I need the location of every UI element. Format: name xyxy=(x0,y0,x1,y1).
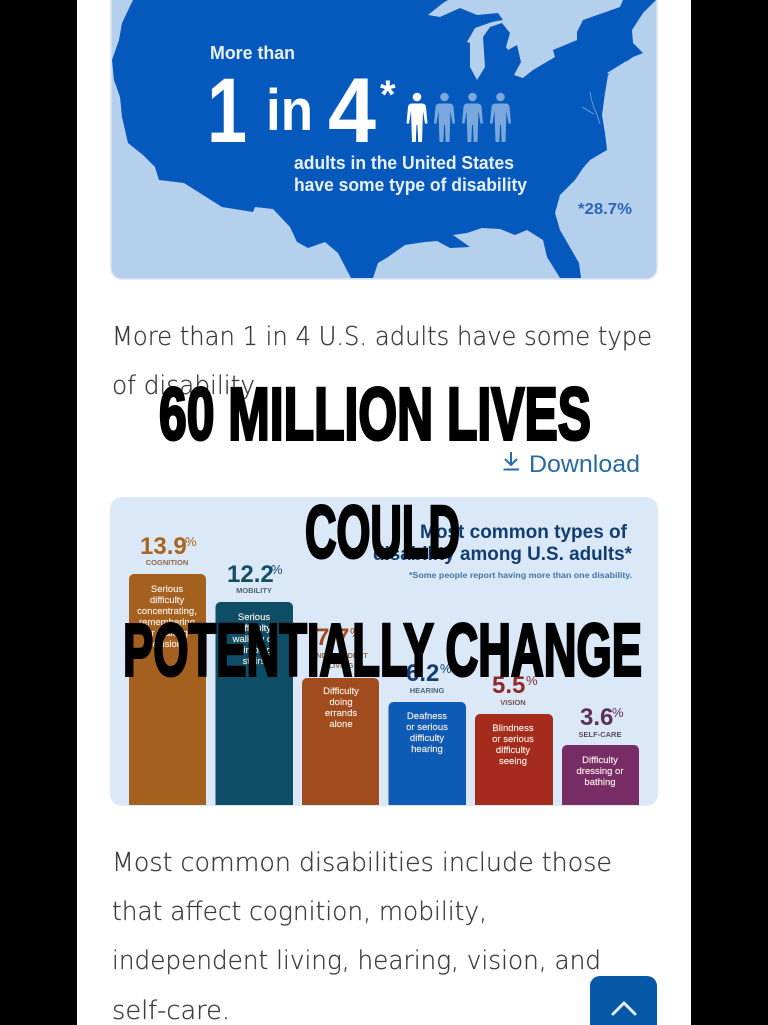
bar: independent living: doing xyxy=(329,697,353,708)
bar: independent living: LIVING xyxy=(328,661,354,670)
text: more than: More than xyxy=(210,43,295,63)
bar: cognition xyxy=(129,533,206,805)
bar: independent living xyxy=(302,624,379,805)
bar: self-care xyxy=(562,704,639,805)
bar: hearing: difficulty xyxy=(410,733,444,744)
bar: mobility: difficulty xyxy=(237,623,271,634)
bar: vision: Blindness xyxy=(492,723,534,734)
panel: map card xyxy=(111,0,657,279)
overlay title: 60 million lives could potentially change: COULD xyxy=(305,490,460,574)
bar: mobility: climbing xyxy=(237,645,271,656)
scroll to top button xyxy=(590,976,657,1025)
bar: self-care: SELF-CARE xyxy=(579,730,621,739)
bar: cognition: COGNITION xyxy=(146,558,188,567)
bar: self-care: % xyxy=(612,705,624,720)
bar: mobility xyxy=(216,561,293,805)
bar: cognition: 13.9 xyxy=(140,533,187,560)
chart heading xyxy=(373,522,633,565)
bar: mobility: MOBILITY xyxy=(236,586,272,595)
statistic: 1 in 4: 1 xyxy=(207,60,247,162)
bar: vision: % xyxy=(526,673,538,688)
bar: independent living: Difficulty xyxy=(323,686,359,697)
bar: vision: VISION xyxy=(500,698,526,707)
bar: independent living: INDEPENDENT xyxy=(314,651,368,660)
chart heading: Most common types of xyxy=(420,522,628,543)
bar: self-care: bathing xyxy=(584,777,616,788)
statistic: 1 in 4 xyxy=(207,60,396,162)
text block: chart caption xyxy=(112,848,612,1025)
text block: chart caption: independent living, hearing, vision, and xyxy=(112,946,601,976)
map of the United States xyxy=(112,0,656,278)
statistic: 1 in 4: 4 xyxy=(328,60,376,162)
text block: map caption xyxy=(112,322,652,401)
bar: hearing: or serious xyxy=(406,722,448,733)
bar: cognition: or making xyxy=(146,628,188,639)
bar: cognition: difficulty xyxy=(150,595,184,606)
bar: mobility: Serious xyxy=(238,612,270,623)
text: adults in the United States xyxy=(294,153,527,195)
text block: map caption: More than 1 in 4 U.S. adults have some type xyxy=(112,322,652,352)
bar: mobility: stairs xyxy=(243,656,266,667)
text block: map caption: of disability xyxy=(112,371,255,401)
bar: hearing: 6.2 xyxy=(406,660,439,687)
panel: bar chart card xyxy=(110,497,658,806)
bar: independent living: % xyxy=(350,625,362,640)
icon: four people, one highlighted xyxy=(406,93,511,142)
bar: cognition: remembering xyxy=(139,617,195,628)
bar: mobility: 12.2 xyxy=(227,561,274,588)
bar: self-care: dressing or xyxy=(576,766,624,777)
chart heading: disability among U.S. adults* xyxy=(373,544,633,565)
bar: cognition: concentrating, xyxy=(137,606,197,617)
bar: cognition: Serious xyxy=(151,584,183,595)
text block: chart caption: Most common disabilities include those xyxy=(112,848,612,878)
download link: Download xyxy=(529,451,640,478)
bar: vision: seeing xyxy=(499,756,527,767)
footnote: 28.7 percent: *28.7% xyxy=(578,201,632,218)
chart footnote: *Some people report having more than one disability. xyxy=(409,570,632,580)
statistic: 1 in 4: in xyxy=(266,78,313,143)
bar: cognition: decisions xyxy=(147,639,187,650)
bar: hearing: HEARING xyxy=(410,686,444,695)
bar: self-care: Difficulty xyxy=(582,755,618,766)
text: adults in the United States: have some type of disability xyxy=(294,175,527,195)
statistic: 1 in 4: * xyxy=(380,73,396,117)
bar: vision xyxy=(475,672,553,805)
bar: vision: or serious xyxy=(492,734,534,745)
bar: independent living: errands xyxy=(325,708,357,719)
text: adults in the United States: adults in the United States xyxy=(294,153,514,173)
bar: vision: 5.5 xyxy=(492,672,525,699)
bar: mobility: walking or xyxy=(232,634,275,645)
bar: independent living: 7.7 xyxy=(316,624,349,651)
bar: hearing: Deafness xyxy=(407,711,447,722)
bar: hearing: % xyxy=(440,661,452,676)
bar: hearing xyxy=(388,660,466,805)
text block: chart caption: that affect cognition, mobility, xyxy=(112,897,487,927)
bar: mobility: % xyxy=(271,562,283,577)
bar: self-care: 3.6 xyxy=(580,704,613,731)
bar: hearing: hearing xyxy=(411,744,443,755)
bar: cognition: % xyxy=(185,534,197,549)
overlay title: 60 million lives could potentially change xyxy=(123,372,642,692)
bar: independent living: alone xyxy=(329,719,353,730)
bar: vision: difficulty xyxy=(496,745,530,756)
